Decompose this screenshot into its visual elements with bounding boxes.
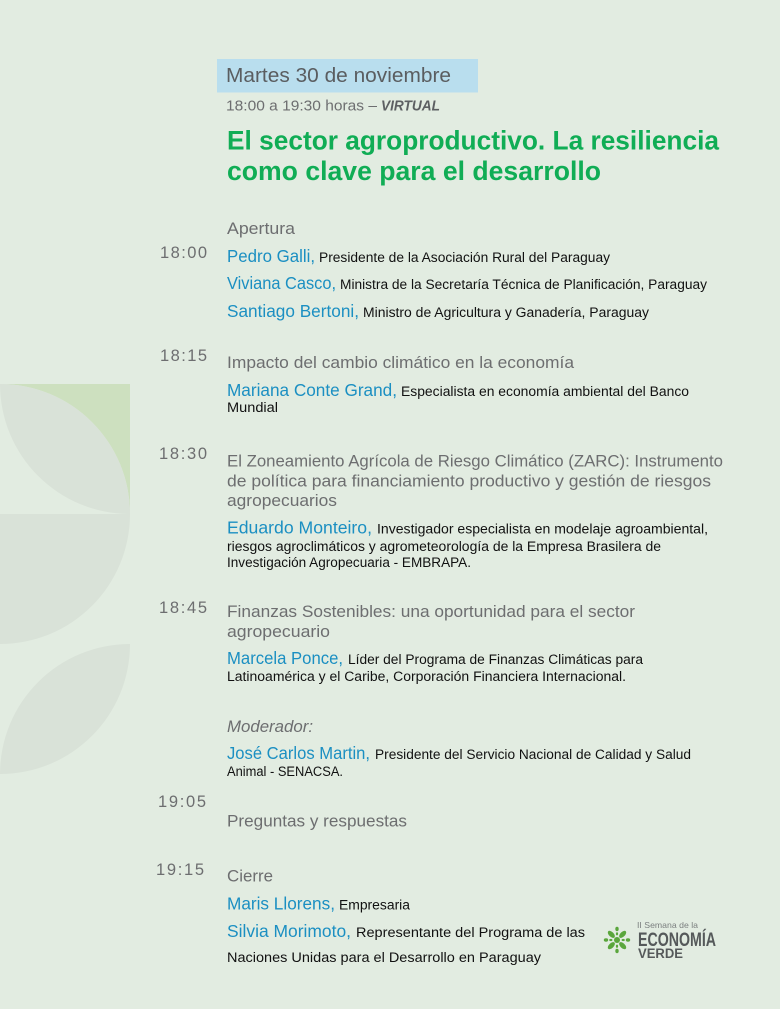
- time 19:05: 19:05: [158, 793, 206, 811]
- time 18:45: 18:45: [159, 599, 207, 617]
- session: ZARC: Investigador especialista en modelaje agroambiental,: [377, 522, 708, 536]
- session: preguntas: Preguntas y respuestas: [227, 812, 407, 830]
- time 18:00: 18:00: [160, 244, 207, 262]
- date banner: Martes 30 de noviembre: [226, 64, 451, 87]
- time and format: [226, 98, 440, 114]
- session: apertura: Ministra de la Secretaría Técnica de Planificación, Paraguay: [340, 277, 707, 292]
- session: moderador: Presidente del Servicio Nacional de Calidad y Salud: [375, 747, 691, 762]
- session: finanzas: Líder del Programa de Finanzas Climáticas para: [348, 652, 644, 667]
- session: apertura: Presidente de la Asociación Rural del Paraguay: [319, 250, 610, 265]
- session: finanzas: Marcela Ponce,: [227, 648, 343, 668]
- session: apertura: Pedro Galli,: [227, 246, 315, 266]
- icon: green leaf rosette: [604, 927, 630, 953]
- session: finanzas: Latinoamérica y el Caribe, Corporación Financiera Internacional.: [227, 669, 626, 684]
- title: El sector agroproductivo. La resiliencia: [227, 126, 719, 156]
- time 18:15: 18:15: [160, 347, 207, 365]
- session: ZARC: [227, 452, 723, 570]
- session: moderador: Moderador:: [227, 717, 313, 736]
- session: ZARC: de política para financiamiento productivo y gestión de riesgos: [227, 472, 711, 490]
- session: apertura: Viviana Casco,: [227, 273, 336, 293]
- session: cierre: [227, 866, 585, 965]
- logo wordmark: [637, 920, 716, 961]
- session: impacto: Especialista en economía ambiental del Banco: [401, 384, 689, 399]
- session: cierre: Representante del Programa de las: [356, 925, 585, 940]
- session: cierre: Naciones Unidas para el Desarrollo en Paraguay: [227, 950, 541, 965]
- time 18:30: 18:30: [159, 445, 207, 463]
- title: [227, 126, 719, 186]
- date banner: [217, 59, 478, 92]
- time 19:15: 19:15: [156, 861, 204, 879]
- session: moderador: Animal - SENACSA.: [227, 764, 343, 779]
- decorative leaf shapes: [0, 384, 130, 774]
- session: cierre: Cierre: [227, 866, 273, 886]
- session: ZARC: El Zoneamiento Agrícola de Riesgo Climático (ZARC): Instrumento: [227, 452, 723, 470]
- session: cierre: Maris Llorens,: [227, 894, 335, 914]
- session: finanzas: [227, 602, 644, 684]
- session: finanzas: agropecuario: [227, 622, 330, 641]
- time and format: VIRTUAL: [381, 98, 440, 114]
- session: ZARC: agropecuarios: [227, 491, 337, 510]
- session: apertura: Apertura: [227, 219, 296, 238]
- session: apertura: Ministro de Agricultura y Ganadería, Paraguay: [363, 305, 649, 320]
- session: ZARC: riesgos agroclimáticos y agrometeorología de la Empresa Brasilera de: [227, 539, 661, 554]
- logo wordmark: VERDE: [638, 946, 683, 961]
- session: impacto: Mariana Conte Grand,: [227, 380, 397, 400]
- session: moderador: [227, 717, 691, 779]
- session: cierre: Empresaria: [339, 898, 411, 912]
- session: cierre: Silvia Morimoto,: [227, 921, 351, 941]
- session: impacto: [227, 353, 689, 415]
- session: ZARC: Investigación Agropecuaria - EMBRAPA.: [227, 555, 471, 570]
- logo wordmark: II Semana de la: [637, 920, 698, 930]
- session: apertura: [227, 219, 707, 321]
- session: moderador: José Carlos Martin,: [227, 743, 370, 763]
- session: finanzas: Finanzas Sostenibles: una oportunidad para el sector: [227, 602, 635, 621]
- session: impacto: Impacto del cambio climático en la economía: [227, 353, 575, 372]
- title: como clave para el desarrollo: [227, 156, 601, 186]
- session: impacto: Mundial: [227, 400, 278, 415]
- session: apertura: Santiago Bertoni,: [227, 301, 359, 321]
- logo wordmark: ECONOMÍA: [638, 929, 716, 951]
- time and format: 18:00 a 19:30 horas –: [226, 98, 378, 114]
- logo: Semana de la Economía Verde: [604, 920, 716, 961]
- session: ZARC: Eduardo Monteiro,: [227, 518, 372, 538]
